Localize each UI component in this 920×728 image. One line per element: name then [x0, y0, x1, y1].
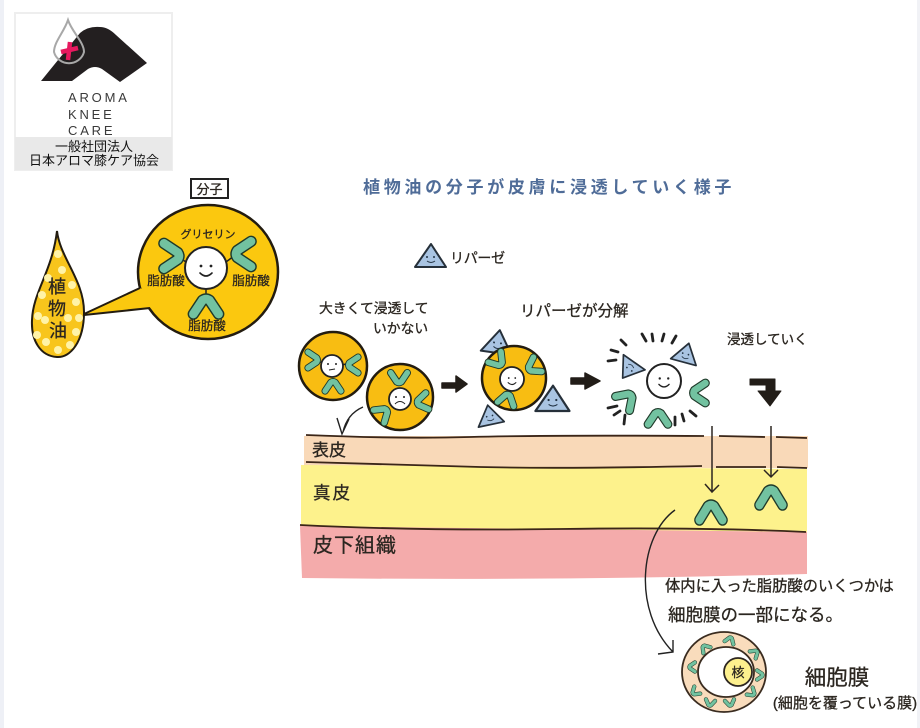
- drop label: 物: [48, 299, 66, 319]
- glycerin face: [185, 247, 227, 289]
- arrow: to cell membrane: [645, 510, 675, 654]
- layer: subcutaneous tissue: [300, 526, 807, 579]
- caption: lipase decomposes: リパーゼが分解: [520, 302, 629, 320]
- diagram: cell membrane: [682, 632, 766, 712]
- organisation name: 一般社団法人: [55, 139, 133, 154]
- nucleus: 核: [731, 665, 745, 680]
- drop label: [48, 276, 67, 341]
- caption: too large to penetrate: いかない: [373, 321, 428, 336]
- logo wordmark: KNEE: [68, 107, 115, 122]
- arrow: fatty acid into dermis 1: [705, 426, 719, 492]
- layer: dermis: 真皮: [313, 483, 352, 503]
- caption: cell membrane: [773, 666, 917, 712]
- panel: molecule detail bubble: 脂肪酸: [188, 318, 226, 333]
- icon: mountain and oil drop: [41, 20, 147, 82]
- caption: too large to penetrate: [319, 301, 429, 336]
- arrow: to epidermis: [337, 407, 363, 434]
- panel: molecule detail bubble: [84, 205, 278, 339]
- fatty acid 2: [759, 490, 783, 505]
- legend: lipase: [415, 244, 505, 267]
- caption: cell membrane: (細胞を覆っている膜): [773, 695, 917, 712]
- bubble labels: グリセリン: [180, 227, 236, 241]
- fatty acids: [164, 243, 179, 269]
- caption: penetrates: 浸透していく: [727, 332, 808, 347]
- caption: fatty acids become cell membrane: [665, 578, 894, 625]
- layer: epidermis: 表皮: [312, 441, 346, 460]
- layer: dermis: [301, 465, 807, 532]
- panel: molecule detail bubble: 脂肪酸: [147, 273, 185, 288]
- logo panel: [15, 13, 172, 170]
- caption: fatty acids become cell membrane: 体内に入った脂肪酸のいくつかは: [665, 578, 894, 595]
- drop label: 植: [48, 276, 66, 297]
- arrow: penetrate black: [750, 379, 781, 406]
- title: 植物油の分子が皮膚に浸透していく様子: [363, 177, 735, 197]
- layer: subcutaneous tissue: 皮下組織: [313, 534, 397, 557]
- caption: cell membrane: 細胞膜: [805, 666, 869, 690]
- molecule: worried 2: [367, 364, 433, 430]
- label: molecule: [191, 179, 228, 198]
- panel: vegetable oil drop: [32, 231, 84, 357]
- organisation name: 日本アロマ膝ケア協会: [29, 153, 159, 168]
- molecule: worried 1: [299, 332, 367, 400]
- logo wordmark: [68, 90, 130, 138]
- burst lines: [608, 334, 696, 425]
- decomposed molecule: [608, 334, 705, 425]
- layer: epidermis: [304, 436, 808, 468]
- caption: too large to penetrate: 大きくて浸透して: [319, 301, 429, 316]
- arrow: fatty acid into dermis 2: [764, 426, 778, 477]
- arrow: to decomposition stage: [571, 373, 600, 389]
- logo wordmark: AROMA: [68, 90, 130, 105]
- molecule with lipase: [474, 328, 570, 427]
- caption: fatty acids become cell membrane: 細胞膜の一部になる。: [668, 605, 843, 625]
- panel: skin layers: [300, 435, 808, 579]
- legend: lipase: リパーゼ: [450, 250, 505, 266]
- logo wordmark: CARE: [68, 123, 115, 138]
- arrow: to lipase stage: [442, 376, 467, 392]
- drop label: 油: [49, 321, 67, 341]
- fatty acid 1: [699, 505, 723, 520]
- label: molecule: 分子: [196, 182, 223, 197]
- organisation name: [29, 139, 159, 168]
- panel: molecule detail bubble: 脂肪酸: [232, 273, 270, 288]
